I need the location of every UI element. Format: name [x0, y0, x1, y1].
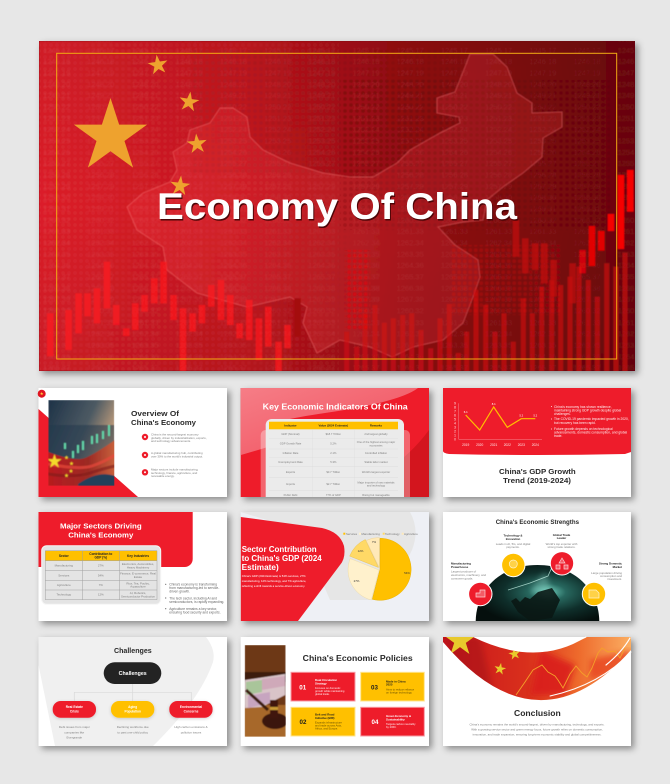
line chart: 8: [454, 405, 456, 409]
bullet list: renewable energy.: [151, 474, 175, 478]
descriptions: Declining workforce due: [117, 725, 149, 729]
card 04: 04: [372, 719, 379, 726]
card 04: Sustainability: [386, 717, 405, 721]
pie chart: [348, 538, 411, 600]
line chart: 5: [454, 417, 456, 421]
card 04: by 2060.: [386, 725, 397, 729]
table: Agriculture: [57, 583, 71, 587]
table card: GDP (Nominal): [281, 432, 300, 436]
card 03: on foreign technology.: [386, 690, 412, 694]
pie chart: 27%: [354, 579, 360, 583]
line chart: 8.1: [492, 402, 496, 406]
card 01: global trade.: [315, 692, 330, 696]
table: Finance, E-commerce, Real: [120, 572, 156, 576]
strength labels: electronics, machinery, and: [451, 573, 486, 577]
strength labels: Powerhouse: [451, 565, 469, 569]
bullet list: challenges.: [554, 412, 571, 416]
bullet list: but recovery has been rapid.: [554, 421, 596, 425]
bullet list: maintaining strong GDP growth despite global: [554, 408, 621, 412]
bullet list: China's economy is transforming: [169, 582, 217, 586]
table card: 5.3%: [330, 460, 337, 464]
table card: 5.2%: [330, 442, 337, 446]
table: Services: [58, 573, 70, 577]
panel: overview of China's economy: [38, 388, 227, 497]
panel: economic strengths: [443, 512, 631, 622]
root node: Challenges: [119, 671, 147, 677]
title: Economy Of China: [158, 188, 518, 228]
legend: [343, 532, 418, 536]
red chart panel: [443, 388, 631, 455]
line chart: 6.1: [464, 410, 468, 414]
table card: One of the highest among major: [357, 440, 395, 444]
bullet list: A global manufacturing hub, contributing: [151, 451, 203, 455]
card 03: Aims to reduce reliance: [386, 687, 415, 691]
flag badge: [38, 390, 46, 398]
table card: 77% of GDP: [326, 493, 341, 497]
panel: GDP growth trend: [443, 388, 631, 497]
table card: Unemployment Rate: [278, 460, 303, 464]
table: Aquaculture: [130, 585, 146, 589]
bullet list: semiconductors, is rapidly expanding.: [169, 600, 224, 604]
line chart: 2020: [476, 443, 483, 447]
panel: conclusion: [443, 625, 631, 746]
flag and chart band: [443, 637, 631, 700]
card 01: 01: [299, 684, 307, 692]
table: Technology: [56, 593, 72, 597]
heading: China's Economic Strengths: [496, 519, 579, 526]
panel: major sectors: [38, 512, 227, 621]
red shape: [241, 517, 344, 621]
table card: Imports: [286, 482, 296, 486]
table card: [261, 419, 410, 497]
strength labels: Market: [613, 565, 622, 569]
card 04: Green Economy &: [386, 714, 411, 718]
pill: environmental: Environmental: [180, 705, 202, 709]
pill: real estate: Crisis: [70, 709, 79, 713]
card 01: [291, 672, 355, 701]
card 03: [361, 672, 424, 701]
table card: GDP Growth Rate: [280, 442, 302, 446]
card 03: Made in China: [386, 679, 406, 683]
panel: challenges: [38, 637, 227, 746]
photo: skyline and flag: [47, 400, 115, 486]
descriptions: Evergrande: [67, 736, 82, 740]
card 04: [361, 707, 424, 736]
table card: 2.1%: [330, 451, 337, 455]
table card: Controlled inflation: [365, 451, 388, 455]
card 02: Africa, and Europe.: [315, 727, 338, 731]
heading: [499, 467, 576, 485]
red number dots: [345, 250, 370, 330]
table: [42, 546, 161, 604]
heading: China's Economy: [131, 418, 197, 427]
line chart: 3: [454, 425, 456, 429]
table card: Public Debt: [284, 493, 298, 497]
card 01: Strategy: [315, 681, 327, 685]
connectors: [74, 684, 191, 701]
table: GDP (%): [94, 556, 107, 560]
bullet list: [165, 582, 224, 614]
bars: [344, 253, 628, 372]
strength labels: Manufacturing: [451, 562, 471, 566]
title: Economy Of China: [157, 186, 517, 227]
panel: sector contribution pie: [241, 512, 429, 621]
root node: [104, 662, 161, 684]
line chart: 2022: [504, 443, 511, 447]
heading: China's Economy: [68, 530, 134, 540]
bullet list: from manufacturing-led to service-: [169, 586, 219, 590]
table: Key Industries: [127, 554, 149, 558]
strength labels: payments.: [506, 545, 520, 549]
paragraph: [242, 574, 307, 588]
table: Rice, Tea, Poultry,: [126, 581, 150, 585]
legend: Manufacturing: [362, 532, 380, 536]
bullet list: technology, finance, agriculture, and: [151, 471, 198, 475]
line chart: [454, 401, 542, 447]
bullet list: [142, 432, 207, 478]
pill: aging population: [111, 701, 154, 718]
line chart: 0: [454, 437, 456, 441]
table card: Stable labor market: [364, 460, 388, 464]
bullet list: China's economy has shown resilience,: [554, 405, 612, 409]
panel: key economic indicators: [229, 388, 429, 497]
table: 27%: [98, 564, 104, 568]
strength labels: investment.: [607, 577, 622, 581]
line chart: 7: [454, 409, 456, 413]
pie chart: 54%: [404, 571, 410, 575]
heading: Estimate): [242, 563, 279, 572]
heading: Trend (2019-2024): [503, 476, 572, 485]
strength labels: Leads in AI, 5G, and digital: [496, 542, 531, 546]
bullet list: The tech sector, including AI and: [169, 596, 217, 600]
line chart: 2: [454, 429, 456, 433]
card 03: 03: [371, 684, 378, 692]
node icons: [476, 558, 599, 598]
candlesticks left: [47, 262, 291, 372]
paragraph: [470, 723, 605, 737]
heading: Overview Of: [131, 409, 180, 418]
card 01: growth while maintaining: [315, 689, 345, 693]
table: 12%: [98, 593, 104, 597]
heading: [60, 522, 142, 540]
card 02: Belt and Road: [315, 713, 335, 717]
pie chart: 12%: [358, 549, 364, 553]
heading: China's Economic Policies: [303, 654, 413, 663]
strength labels: Technology &: [504, 534, 522, 538]
line chart: 5.2: [519, 414, 524, 418]
table card: $3.7 Trillion: [326, 470, 341, 474]
bullet list: driven growth.: [169, 590, 190, 594]
white brush strokes: [545, 637, 631, 696]
bullet list: China is the second-largest economy: [151, 432, 199, 436]
heading: to China's GDP (2024: [242, 554, 322, 563]
red header block: [38, 512, 193, 567]
strength labels: World's top exporter with: [546, 542, 578, 546]
legend: Services: [346, 532, 358, 536]
descriptions: High carbon emissions &: [174, 725, 208, 729]
legend: Technology: [385, 532, 400, 536]
strength labels: [451, 533, 622, 581]
pill: environmental: [169, 701, 213, 718]
pie chart: 7%: [372, 540, 377, 544]
paragraph: China's GDP (2024 Estimate) is 54% services, 27%: [242, 574, 306, 578]
card 02: 02: [300, 719, 307, 726]
strength labels: Innovation: [506, 537, 521, 541]
candlesticks right: [513, 220, 576, 303]
table card: Exports: [286, 470, 296, 474]
heading: [242, 545, 322, 572]
bullet list: [551, 405, 629, 438]
table card: Rising but manageable: [362, 493, 390, 497]
card 04: Targets carbon neutrality: [386, 722, 416, 726]
flag stars: [74, 53, 208, 195]
photo: money and gavel: [245, 645, 288, 737]
heading: Conclusion: [514, 709, 561, 718]
strength labels: consumer goods.: [451, 576, 473, 580]
pill: real estate: Real Estate: [66, 705, 83, 709]
card 02: Expands infrastructure: [315, 721, 342, 725]
table: 7%: [99, 583, 103, 587]
heading: [131, 409, 197, 427]
table: Sector: [59, 554, 70, 558]
bullet list: globally, driven by industrialization, exports,: [151, 436, 207, 440]
line chart: 2023: [518, 443, 525, 447]
strength labels: Strong Domestic: [599, 562, 622, 566]
strength labels: Leader: [557, 536, 567, 540]
table card: World's largest exporter: [362, 470, 390, 474]
bullet list: and technology advancements.: [151, 439, 191, 443]
table card: Value (2024 Estimate): [319, 424, 348, 428]
heading: Challenges: [114, 646, 152, 655]
pill: aging population: Population: [124, 709, 141, 713]
heading: Major Sectors Driving: [60, 522, 142, 530]
table: Semiconductor Production: [121, 594, 155, 598]
line chart: 1: [454, 433, 456, 437]
bullet list: Future growth depends on technological: [554, 427, 613, 431]
paragraph: reflecting a shift towards a service-driven economy.: [242, 584, 305, 588]
table: Contribution to: [89, 552, 112, 556]
table: Estate: [134, 575, 142, 579]
heading: Key Economic Indicators Of China: [263, 402, 408, 412]
table card: $18.7 Trillion: [326, 432, 341, 436]
descriptions: pollution issues: [181, 730, 202, 734]
bullet list: over 30% to the world's industrial output.: [151, 454, 203, 458]
pill: aging population: Aging: [128, 705, 137, 709]
heading: Sector Contribution: [242, 545, 317, 554]
card 01: Focuses on domestic: [315, 686, 341, 690]
card 03: 2025: [386, 682, 393, 686]
table card: Remarks: [370, 424, 382, 428]
card 02: Initiative (BRI): [315, 716, 334, 720]
panel: economic policies: [241, 637, 429, 746]
red triangle: [38, 409, 138, 497]
pill: environmental: Concerns: [184, 709, 199, 713]
table card: Indicator: [284, 424, 297, 428]
table card: Major importer of raw materials: [357, 480, 395, 484]
paragraph: innovation, and trade expansion, ensuring long-term economic stability and global competitiveness.: [473, 733, 602, 737]
card 01: Dual Circulation: [315, 678, 337, 682]
strength labels: strong trade relations.: [548, 545, 576, 549]
table: Manufacturing: [55, 564, 73, 568]
descriptions: Debt issues from major: [59, 725, 90, 729]
table card: and technology: [367, 484, 386, 488]
table card: $2.7 Trillion: [326, 482, 341, 486]
bullet list: ensuring food security and exports.: [169, 610, 221, 614]
table: Electronics, Automobiles,: [122, 562, 154, 566]
line chart: 2024: [532, 443, 539, 447]
table card: economies: [370, 443, 383, 447]
strength labels: Global Trade: [553, 533, 571, 537]
strength nodes: [469, 552, 606, 606]
bullet list: Agriculture remains a key sector,: [169, 607, 217, 611]
card 02: [291, 707, 355, 736]
bullet list: advancements, domestic consumption, and global: [554, 430, 627, 434]
paragraph: manufacturing, 12% technology, and 7% agriculture,: [242, 579, 307, 583]
strength labels: consumption and: [600, 574, 622, 578]
strength labels: Largest producer of: [451, 570, 476, 574]
descriptions: [59, 725, 208, 740]
panel: hero slide: [39, 41, 635, 372]
line chart: 6: [454, 413, 456, 417]
pill: real estate: [53, 701, 96, 718]
line chart: 2019: [462, 443, 469, 447]
line chart: 9: [454, 401, 456, 405]
paragraph: China's economy remains the world's second-largest, driven by manufacturing, technology, and exports.: [470, 723, 605, 727]
dome image with hand: [476, 565, 599, 622]
line chart: 4: [454, 421, 456, 425]
table: 54%: [98, 573, 104, 577]
gold frame: [57, 53, 617, 359]
table: Heavy Machinery: [127, 565, 150, 569]
line chart: 2021: [490, 443, 497, 447]
heading: China's GDP Growth: [499, 467, 576, 476]
bullet list: The COVID-19 pandemic impacted growth in 2020,: [554, 417, 629, 421]
map of China: [127, 54, 562, 357]
legend: Agriculture: [404, 532, 418, 536]
table card: Inflation Rate: [283, 451, 299, 455]
bullet list: trade.: [554, 434, 563, 438]
descriptions: companies like: [64, 730, 85, 734]
line chart: 5.2: [533, 414, 538, 418]
bullet list: Major sectors include manufacturing,: [151, 468, 198, 472]
table: AI, Robotics,: [130, 591, 146, 595]
strength labels: Large population driving: [591, 571, 622, 575]
paragraph: With a growing service sector and green energy focus, future growth relies on domestic consumption,: [471, 728, 603, 732]
card 02: and trade across Asia,: [315, 724, 342, 728]
descriptions: to past one-child policy: [117, 730, 148, 734]
table card: 2nd largest globally: [364, 432, 388, 436]
